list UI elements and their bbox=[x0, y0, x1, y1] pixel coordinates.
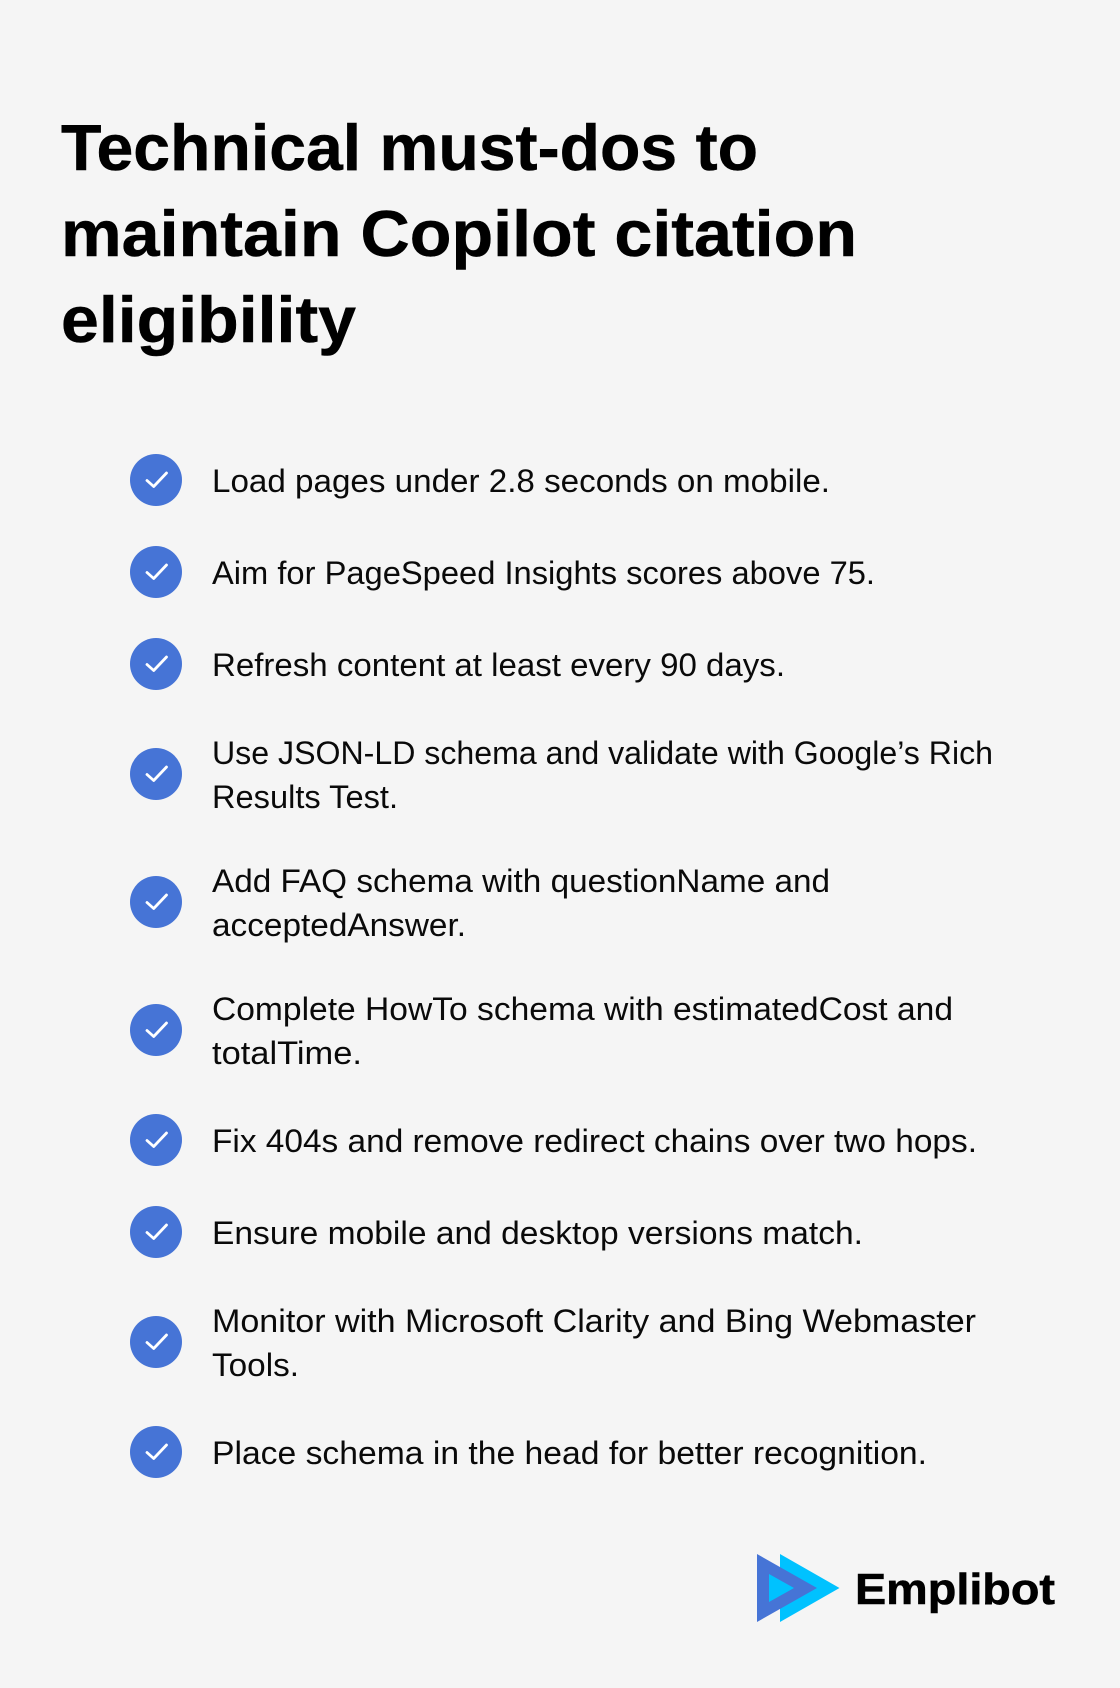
icon: play triangles bbox=[757, 1554, 840, 1622]
item: fix 404s bbox=[130, 1114, 977, 1166]
title: eligibility bbox=[61, 283, 356, 356]
item: HowTo schema bbox=[130, 991, 953, 1071]
item: FAQ schema bbox=[130, 863, 830, 943]
wordmark: Emplibot bbox=[855, 1565, 1055, 1614]
item: refresh content: Refresh content at least every 90 days. bbox=[212, 647, 785, 683]
title: Technical must-dos to bbox=[61, 111, 758, 184]
item: schema in head bbox=[130, 1426, 927, 1478]
item: mobile and desktop: Ensure mobile and desktop versions match. bbox=[212, 1215, 863, 1251]
item: load pages bbox=[130, 454, 830, 506]
item: load pages: Load pages under 2.8 seconds on mobile. bbox=[212, 463, 830, 499]
item: mobile and desktop bbox=[130, 1206, 863, 1258]
logo: Emplibot bbox=[757, 1554, 1055, 1622]
item: monitor tools: Monitor with Microsoft Clarity and Bing Webmaster bbox=[212, 1303, 976, 1339]
item: JSON-LD schema: Use JSON-LD schema and validate with Google’s Rich bbox=[212, 735, 993, 771]
item: PageSpeed scores bbox=[130, 546, 875, 598]
item: FAQ schema: acceptedAnswer. bbox=[212, 907, 466, 943]
item: FAQ schema: Add FAQ schema with questionName and bbox=[212, 863, 830, 899]
item: HowTo schema: Complete HowTo schema with estimatedCost and bbox=[212, 991, 953, 1027]
title: maintain Copilot citation bbox=[61, 197, 857, 270]
item: monitor tools bbox=[130, 1303, 976, 1383]
item: schema in head: Place schema in the head for better recognition. bbox=[212, 1435, 927, 1471]
item: fix 404s: Fix 404s and remove redirect chains over two hops. bbox=[212, 1123, 977, 1159]
item: JSON-LD schema: Results Test. bbox=[212, 779, 398, 815]
item: refresh content bbox=[130, 638, 785, 690]
item: PageSpeed scores: Aim for PageSpeed Insights scores above 75. bbox=[212, 555, 875, 591]
item: monitor tools: Tools. bbox=[212, 1347, 299, 1383]
title bbox=[61, 111, 857, 356]
checklist bbox=[130, 454, 993, 1478]
item: JSON-LD schema bbox=[130, 735, 993, 815]
item: HowTo schema: totalTime. bbox=[212, 1035, 362, 1071]
